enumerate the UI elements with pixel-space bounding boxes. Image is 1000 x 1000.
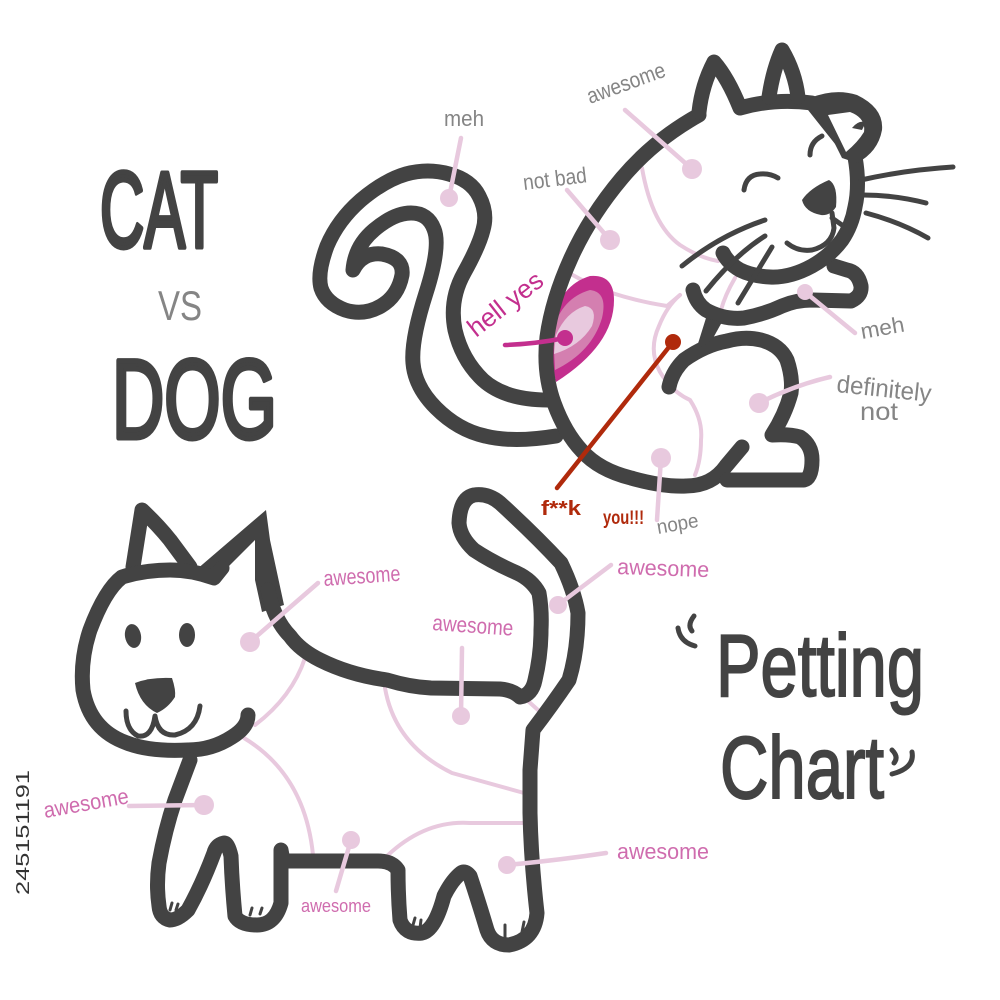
cat pointer: red bbox=[557, 334, 681, 488]
label: not bad: not bad bbox=[522, 162, 588, 195]
title word: VS: VS bbox=[158, 282, 202, 329]
cat pointer lines and dots bbox=[440, 110, 855, 520]
opening quote bbox=[678, 616, 695, 646]
label: awesome: awesome bbox=[583, 57, 669, 109]
illustration: cat bbox=[320, 50, 953, 539]
label: awesome back: awesome bbox=[432, 610, 514, 641]
cat head line bbox=[810, 136, 822, 155]
dog toes bbox=[170, 903, 524, 937]
label: nope: nope bbox=[655, 510, 700, 539]
label: awesome tail: awesome bbox=[617, 554, 710, 582]
word: Chart: Chart bbox=[720, 718, 884, 817]
dog head bbox=[82, 568, 248, 750]
cat eye bbox=[744, 174, 778, 190]
label: meh: meh bbox=[444, 106, 484, 131]
title word: CAT: CAT bbox=[100, 149, 218, 270]
dog pointer lines and dots bbox=[129, 565, 611, 891]
cat chest wedge bbox=[696, 318, 722, 350]
cat hind leg and foot bbox=[669, 338, 812, 480]
cat whiskers bbox=[682, 167, 953, 303]
cat small ear bbox=[810, 92, 882, 163]
word: Petting: Petting bbox=[716, 616, 924, 715]
dog ears bbox=[133, 510, 284, 612]
dog pink zone lines bbox=[244, 658, 538, 856]
dog nose bbox=[135, 678, 175, 713]
heading: petting chart bbox=[678, 616, 924, 817]
cat heart hot spot bbox=[551, 276, 614, 382]
label: awesome rear: awesome bbox=[617, 839, 709, 864]
dog eyes bbox=[123, 623, 195, 649]
title: cat vs dog bbox=[100, 149, 277, 462]
cat tail bbox=[320, 171, 556, 440]
cat pointer: hell yes bbox=[505, 330, 573, 346]
label: awesome belly: awesome bbox=[301, 896, 371, 916]
illustration: dog bbox=[42, 495, 710, 945]
label: red curse: you!!! bbox=[603, 508, 644, 529]
closing quote bbox=[892, 750, 912, 774]
label: red curse: f**k bbox=[541, 498, 582, 520]
title word: DOG: DOG bbox=[112, 337, 277, 462]
cat head bbox=[699, 62, 858, 277]
cat right ear bbox=[769, 50, 798, 97]
cat mouth bbox=[787, 213, 842, 250]
label: definitely not: not bbox=[860, 398, 898, 426]
dog mouth bbox=[126, 706, 200, 736]
label: red curse bbox=[541, 498, 644, 529]
label: awesome front: awesome bbox=[42, 783, 131, 823]
label: awesome neck: awesome bbox=[323, 561, 401, 591]
cat body bbox=[546, 115, 742, 486]
cat nose bbox=[802, 180, 836, 215]
cat arm and paw bbox=[693, 266, 861, 318]
dog body and tail bbox=[158, 495, 578, 945]
cat ear inner bbox=[828, 112, 864, 152]
cat pink zone lines bbox=[569, 168, 735, 475]
label: definitely not: definitely bbox=[835, 370, 933, 408]
cat ear mark bbox=[852, 122, 866, 130]
label: definitely not bbox=[835, 370, 933, 426]
stock id: 245151191 bbox=[13, 770, 33, 895]
label: meh right: meh bbox=[859, 312, 906, 344]
label: hell yes: hell yes bbox=[461, 265, 549, 343]
